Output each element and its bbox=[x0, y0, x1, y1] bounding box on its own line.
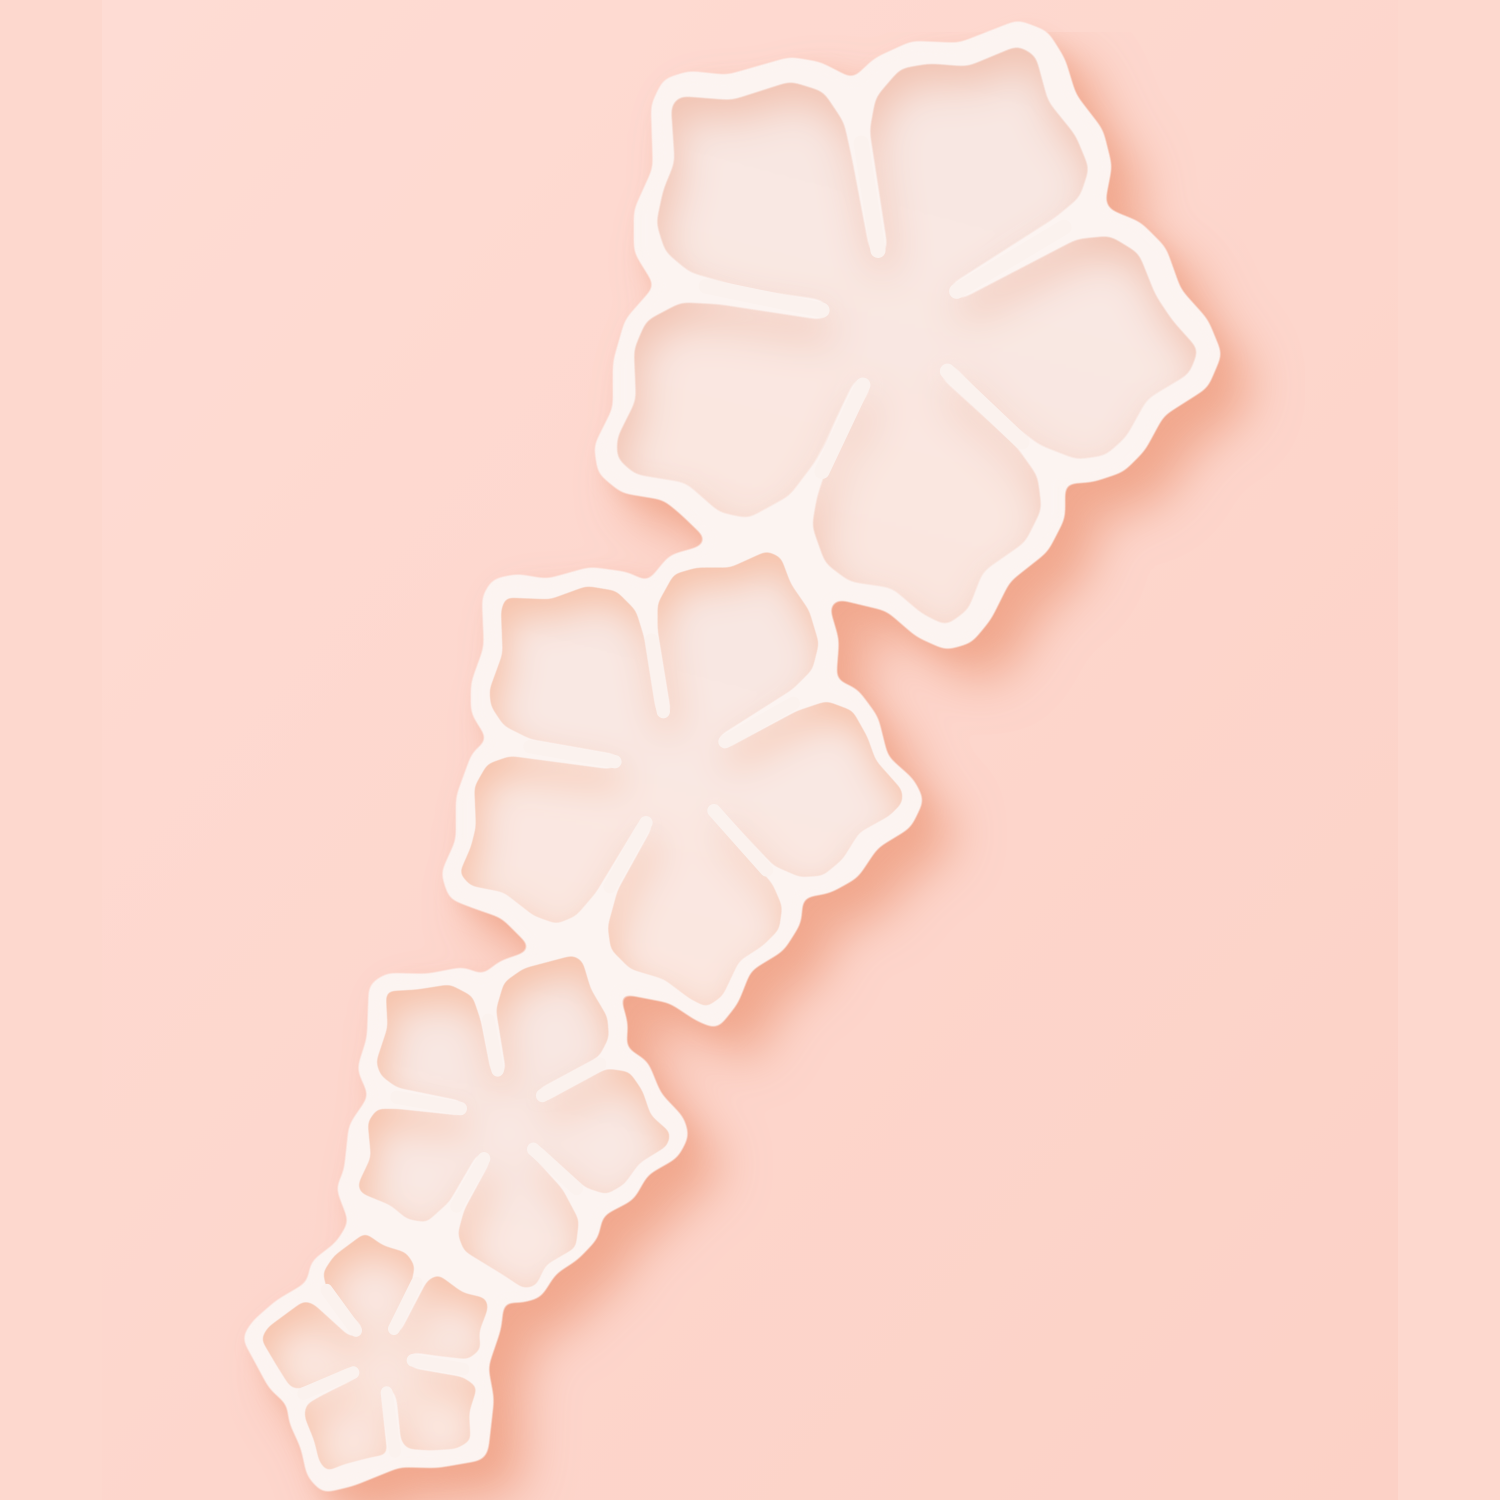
ribs: large flower bbox=[706, 143, 1064, 471]
mold silhouette with shadow bbox=[243, 21, 1221, 1492]
ribs: smallest flower bbox=[303, 1283, 463, 1452]
cavity: medium flower bbox=[458, 550, 903, 1008]
cavity: large flower bbox=[616, 44, 1200, 627]
ribs: medium flower bbox=[530, 640, 793, 887]
ribs: small flower bbox=[397, 1020, 600, 1206]
cavity: smallest flower bbox=[260, 1232, 489, 1473]
cavity: small flower bbox=[357, 954, 672, 1289]
flower mold bbox=[243, 21, 1221, 1492]
